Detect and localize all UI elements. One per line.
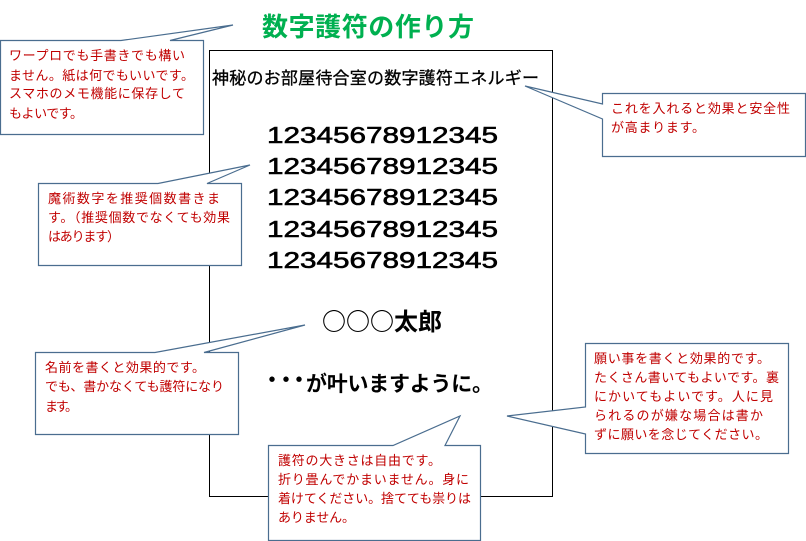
callout: paper type	[0, 25, 233, 134]
wish line: ・・・	[262, 364, 310, 394]
magic number rows: 12345678912345	[267, 247, 498, 273]
callout: size	[268, 416, 480, 540]
callout: name: 名前を書くと効果的です。	[45, 360, 205, 375]
magic number rows: 12345678912345	[267, 184, 498, 210]
name line: ○○○太郎	[322, 302, 442, 337]
magic number rows: 12345678912345	[267, 216, 498, 242]
callout: wish	[507, 344, 788, 454]
callout: wish: られるのが嫌な場合は書か	[594, 408, 763, 423]
callout: wish: にかいてもよいです。人に見	[594, 389, 773, 404]
callout: energy heading: が高まります。	[611, 120, 705, 135]
magic number rows: 12345678912345	[267, 153, 498, 179]
callout: size: ありません。	[278, 510, 355, 525]
magic number rows	[267, 122, 498, 273]
callout: size: 着けてください。捨てても祟りは	[278, 491, 471, 506]
callout: wish: 願い事を書くと効果的です。	[594, 351, 770, 366]
wish line: が叶いますように。	[306, 368, 493, 398]
callout: name	[36, 325, 305, 434]
callout: magic numbers: 魔術数字を推奨個数書きま	[48, 191, 220, 206]
panel: talisman paper	[210, 50, 552, 496]
title: 数字護符の作り方	[262, 12, 474, 42]
callout: magic numbers: はあります）	[48, 229, 120, 244]
callout: paper type: スマホのメモ機能に保存して	[9, 86, 185, 101]
callout: paper type: ワープロでも手書きでも構い	[9, 48, 185, 63]
callout: name: ます。	[45, 399, 78, 414]
callout: magic numbers: す。（推奨個数でなくても効果	[48, 210, 230, 225]
callout: size: 護符の大きさは自由です。	[278, 453, 441, 468]
callout: name: でも、書かなくても護符になり	[45, 379, 224, 394]
callout: paper type: ません。紙は何でもいいです。	[9, 68, 194, 83]
callout: paper type: もよいです。	[9, 106, 83, 121]
callout: energy heading	[525, 86, 806, 156]
callout: wish: たくさん書いてもよいです。裏	[594, 370, 779, 385]
callout: size: 折り畳んでかまいません。身に	[278, 472, 469, 487]
callout: wish: ずに願いを念じてください。	[594, 427, 768, 442]
callout: energy heading: これを入れると効果と安全性	[611, 101, 790, 116]
callout: magic numbers	[38, 165, 250, 266]
magic number rows: 12345678912345	[267, 122, 498, 148]
paper heading: 神秘のお部屋待合室の数字護符エネルギー	[212, 69, 539, 88]
